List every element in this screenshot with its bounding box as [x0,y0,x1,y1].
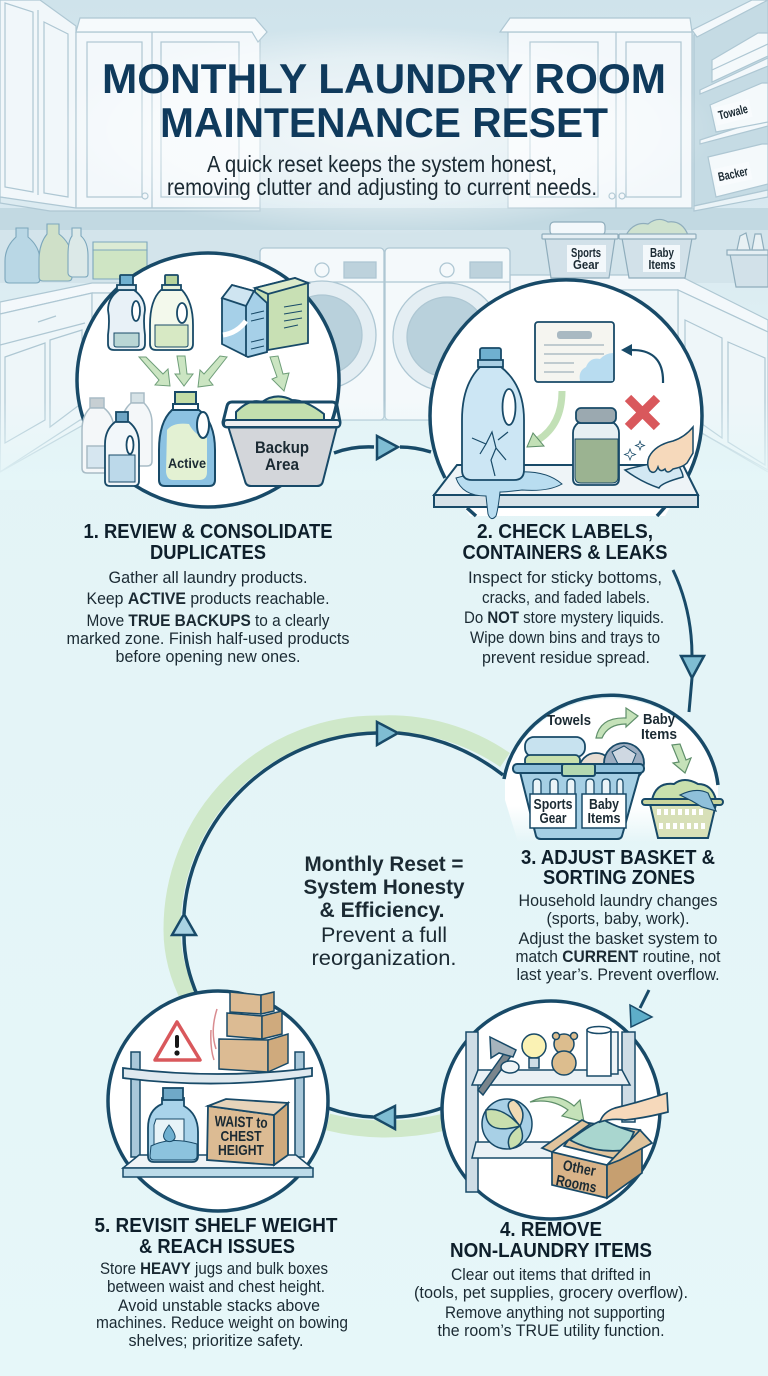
icon: blue carton [222,285,267,357]
label: Baby Items above basket [641,711,677,743]
text: step 1 body [66,568,350,666]
label: Sports Gear tag: Gear [540,810,567,827]
text: step 2 body: Do NOT store mystery liquids. [464,608,664,627]
icon: green down arrow [672,744,691,773]
center callout [304,853,465,970]
heading: step 4: NON-LAUNDRY ITEMS [450,1239,652,1262]
bin label: Baby Items [643,245,680,272]
subtitle: A quick reset keeps the system honest, [207,151,557,177]
heading: step 5 [94,1214,338,1258]
icon: cloth [625,460,683,488]
label: Baby Items tag [582,794,626,828]
label: Backup Area: Backup [255,438,309,457]
heading: step 2: 2. CHECK LABELS, [477,520,653,543]
arrow: step 5 to reset loop [172,914,196,935]
text: step 5 body: shelves; prioritize safety. [128,1331,304,1350]
text: step 2 body: prevent residue spread. [482,648,650,667]
icon: blue sorting basket [513,764,644,839]
icon: lower shelf [123,1155,313,1177]
icon: waist to chest height box [207,1099,288,1165]
label: Baby Items tag: Items [588,810,620,827]
panel: step 5 circle illustration [108,991,328,1211]
icon: folded towels [525,737,585,767]
center callout: Monthly Reset = [304,853,464,876]
text: step 5 body [96,1259,348,1350]
text: step 4 body: Remove anything not supporting [445,1303,665,1322]
icon: jar [573,408,619,485]
icon: half-used bottle green [150,275,193,350]
arrow: step 2 to 3 [681,656,704,678]
icon: green arrow to box [530,1097,584,1122]
label: Backup Area: Area [265,455,299,474]
icon: light bulbs [501,1034,546,1073]
cycle line: loop through the inner circle [184,733,503,1117]
label: Other Rooms: Rooms [554,1172,598,1197]
text: step 3 body: (sports, baby, work). [546,909,690,928]
heading: step 2 [462,520,668,564]
center callout: & Efficiency. [320,899,444,922]
icon: teddy bear [552,1032,578,1075]
text: step 5 body: machines. Reduce weight on bowing [96,1313,348,1332]
bin label: Baby Items: Items [648,258,676,272]
arrow: step 1 to 2 [377,436,398,459]
heading: step 4: 4. REMOVE [500,1218,602,1241]
icon: wobble marks [211,1009,217,1060]
background: laundry room illustration [0,0,768,472]
label: Sports Gear tag: Sports [534,796,572,813]
icon: curved return arrow [632,350,663,383]
heading: step 3: 3. ADJUST BASKET & [521,846,715,869]
arrow: loop back to step 3 [377,722,398,745]
label: waist to chest height: CHEST [220,1128,262,1145]
text: step 1 body: Gather all laundry products. [108,568,308,587]
heading: step 2: CONTAINERS & LEAKS [462,541,668,564]
icon: metal shelf frame [466,1032,635,1192]
shelf bin label: Towale: Towale [717,102,749,123]
label: waist to chest height [214,1113,268,1159]
text: step 4 body: the room’s TRUE utility function. [438,1321,664,1340]
panel: step 2 circle illustration [430,280,702,519]
center callout: reorganization. [312,947,456,970]
label: Baby Items tag: Baby [589,796,620,813]
icon: green arrowhead [527,433,544,447]
icon: active bottle [159,392,215,486]
floor fade [0,400,768,490]
label: waist to chest height: WAIST to [214,1113,268,1132]
text: step 4 body: (tools, pet supplies, grocery overflow). [414,1283,688,1302]
text: step 3 body: Adjust the basket system to [518,929,718,948]
icon: backup bin [223,396,340,486]
text: step 5 body: between waist and chest height. [107,1277,325,1296]
panel: step 3 circle illustration [504,695,723,842]
text: step 1 body: Move TRUE BACKUPS to a clearly [86,611,330,630]
panel: step 1 circle illustration [77,253,340,507]
label: Other Rooms: Other [561,1157,597,1180]
connector: step 2 to step 3 [673,570,692,712]
text: step 2 body: cracks, and faded labels. [482,588,650,607]
label: Baby Items above basket: Baby [643,711,676,728]
text: step 3 body: match CURRENT routine, not [516,947,721,966]
shelf bin label: Backer: Backer [717,164,749,184]
label: Sports Gear tag [530,794,576,828]
title [102,55,666,146]
icon: wiping hand [648,427,693,472]
label: Other Rooms [554,1156,601,1197]
icon: paper towel roll [587,1026,618,1076]
heading: step 5: & REACH ISSUES [139,1235,295,1258]
text: step 2 body: Wipe down bins and trays to [470,628,660,647]
text: step 4 body [414,1265,688,1340]
label: Backup Area [255,438,309,474]
icon: cardboard box with hand [542,1093,668,1198]
title: MONTHLY LAUNDRY ROOM [102,55,666,102]
icon: stacked boxes [219,992,288,1072]
heading: step 1: DUPLICATES [150,541,266,564]
text: step 1 body: before opening new ones. [116,647,300,666]
icon: shelf [434,465,698,507]
connector: step 3 to step 4 [640,990,649,1008]
subtitle [167,151,597,200]
icon: green curved arrow [596,708,638,738]
shelf bin label: Backer [714,162,752,187]
icon: green down arrow [538,391,562,440]
label: Active: Active [168,455,206,471]
heading: step 3 [521,846,715,889]
label: Baby Items above basket: Items [641,726,677,743]
icon: cracked bottle with puddle [456,348,562,519]
text: step 3 body [516,891,721,984]
icon: red X [628,398,657,427]
text: step 3 body: last year’s. Prevent overflow. [516,965,720,984]
subtitle: removing clutter and adjusting to current needs. [167,174,597,200]
center callout: Prevent a full [321,924,447,947]
text: step 4 body: Clear out items that drifted in [451,1265,651,1284]
arrow: step 3 to 4 [630,1005,652,1027]
icon: small bottle [105,412,139,486]
text: step 1 body: Keep ACTIVE products reachable. [86,589,330,608]
heading: step 4 [450,1218,652,1262]
text: step 1 body: marked zone. Finish half-used products [66,629,350,648]
bin label: Sports Gear: Gear [573,258,599,272]
icon: shelf uprights [131,1052,304,1157]
center callout: System Honesty [304,876,465,899]
icon: upper shelf [123,1068,312,1084]
bin label: Baby Items: Baby [650,246,674,260]
heading: step 1 [84,520,332,564]
label: waist to chest height: HEIGHT [218,1142,264,1159]
icon: arrowhead [621,344,632,356]
icon: faded label card [535,322,614,382]
connector: step 1 to step 2 [334,447,431,453]
icon: sparkles [624,441,644,460]
text: step 2 body [464,568,664,667]
icon: green small basket [642,780,723,838]
icon: warning triangle [155,1022,200,1060]
background: washer and dryer [260,248,510,420]
text: step 5 body: Store HEAVY jugs and bulk boxes [100,1259,328,1278]
background: sorting bins on counter [542,219,768,287]
title: MAINTENANCE RESET [160,99,608,146]
green cycle ring [172,724,505,1129]
icon: green box [255,278,308,350]
panel: step 4 circle illustration [442,1001,668,1219]
icon: half-used bottle blue [108,275,145,350]
icon: faded backup bottles [82,393,152,473]
title glow [54,25,714,235]
bin label: Sports Gear: Sports [571,246,601,260]
arrow: step 4 to 5 [373,1106,395,1129]
heading: step 3: SORTING ZONES [543,866,695,889]
shelf bin label: Towale [713,99,753,125]
text: step 3 body: Household laundry changes [518,891,718,910]
background: shelf bottles and box on the left [5,224,147,283]
icon: green consolidation arrows [139,356,289,391]
icon: beach ball [482,1099,532,1149]
text: step 2 body: Inspect for sticky bottoms, [468,568,662,587]
heading: step 5: 5. REVISIT SHELF WEIGHT [94,1214,338,1237]
heading: step 1: 1. REVIEW & CONSOLIDATE [84,520,332,543]
icon: hammer [478,1037,516,1095]
text: step 5 body: Avoid unstable stacks above [118,1296,320,1315]
icon: detergent jug [148,1088,198,1162]
bin label: Sports Gear [567,245,606,272]
label: Towels: Towels [547,712,591,729]
icon: balls [579,743,644,787]
